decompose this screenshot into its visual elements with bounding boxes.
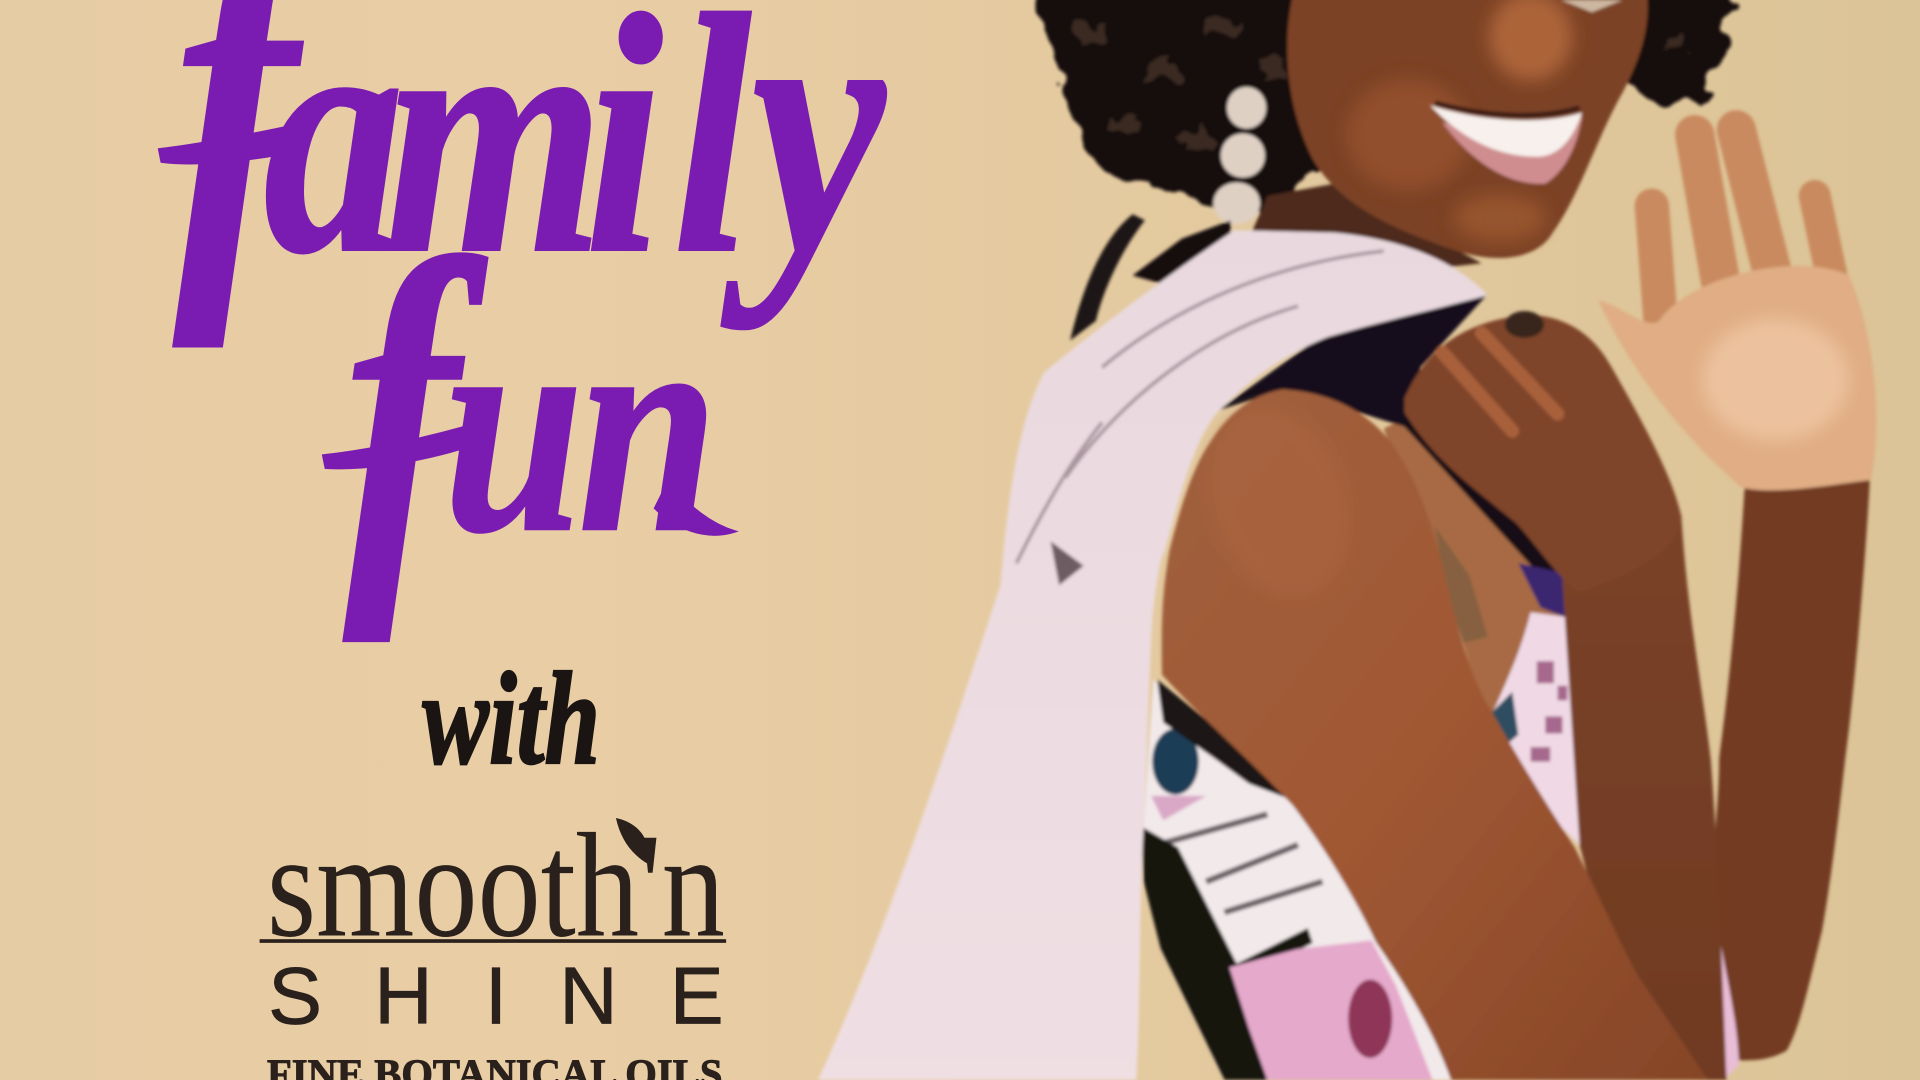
eye glimpse (1561, 0, 1622, 12)
dress strap behind jacket (1070, 214, 1145, 340)
bent forearm (1561, 514, 1727, 1080)
hair (1026, 0, 1736, 215)
neck (1249, 184, 1482, 276)
raised hand fingers (1652, 130, 1837, 318)
earring pearls (1213, 87, 1266, 224)
logo: Smooth'n Shine (260, 804, 726, 1080)
nose highlight (1489, 0, 1572, 81)
pearl middle (1221, 133, 1265, 178)
dress lower panel (1142, 680, 1494, 1080)
dress blue flower (1152, 729, 1199, 795)
dress flowers small (1531, 661, 1567, 762)
title line: fun: f (343, 175, 489, 643)
swash: fun f crossbar (323, 422, 480, 468)
finger highlights (1442, 333, 1558, 431)
cheek warmth (1347, 80, 1469, 190)
hair highlights (1078, 18, 1687, 146)
title line: fun: n (578, 257, 718, 596)
jacket folds (1016, 251, 1384, 563)
upper arm highlight (1185, 388, 1374, 616)
logo leaf (616, 818, 649, 864)
hair left mass (1026, 0, 1616, 215)
finger one (1652, 206, 1660, 318)
logo wordmark: SHINE: SHINE (268, 952, 724, 1042)
dress black brush strokes (1141, 827, 1313, 1080)
subtitle: with: with (422, 645, 600, 792)
lower lip (1442, 116, 1582, 184)
raised forearm (1712, 480, 1870, 1060)
logo wordmark: smooth'n: smooth'n (267, 804, 725, 969)
title line: fun: u (444, 257, 583, 596)
upper arm (1162, 389, 1708, 1080)
dress flower centre (1348, 980, 1392, 1058)
dress black band (1157, 680, 1300, 803)
smile line (1435, 103, 1580, 115)
finger two (1695, 135, 1722, 288)
dress pink tint (1151, 796, 1206, 820)
teeth (1430, 105, 1582, 157)
face (1287, 0, 1648, 258)
dress pink flower (1229, 940, 1433, 1080)
jacket lapel notch (1051, 541, 1084, 585)
dress strap across chest (1408, 416, 1573, 598)
palm highlight (1702, 318, 1849, 441)
swash: fun n tail (655, 484, 735, 535)
dress strip under jacket (1218, 294, 1488, 429)
jacket over shoulder (818, 230, 1488, 1080)
hair right mass (1616, 0, 1736, 103)
title: family fun (159, 0, 888, 643)
underarm shading (1435, 527, 1488, 643)
logo underline (260, 939, 726, 943)
pearl top (1227, 87, 1266, 129)
finger three (1736, 130, 1773, 276)
dress front between arms (1488, 612, 1580, 845)
ring (1505, 311, 1544, 338)
palm (1598, 266, 1876, 490)
dress dark spot (1491, 692, 1518, 747)
swash: family f crossbar (159, 122, 309, 163)
pearl bottom (1213, 182, 1260, 224)
hand on shoulder (1404, 315, 1681, 593)
dress black patch at shoulder (1133, 220, 1231, 284)
purple floral panel (1518, 563, 1577, 622)
dress thin strokes (1157, 814, 1322, 912)
woman in floral dress (818, 0, 1876, 1080)
dress sliver beside elbow (1718, 943, 1739, 1078)
chest skin (1384, 416, 1580, 725)
chin warmth (1453, 193, 1547, 242)
finger four (1815, 196, 1837, 300)
